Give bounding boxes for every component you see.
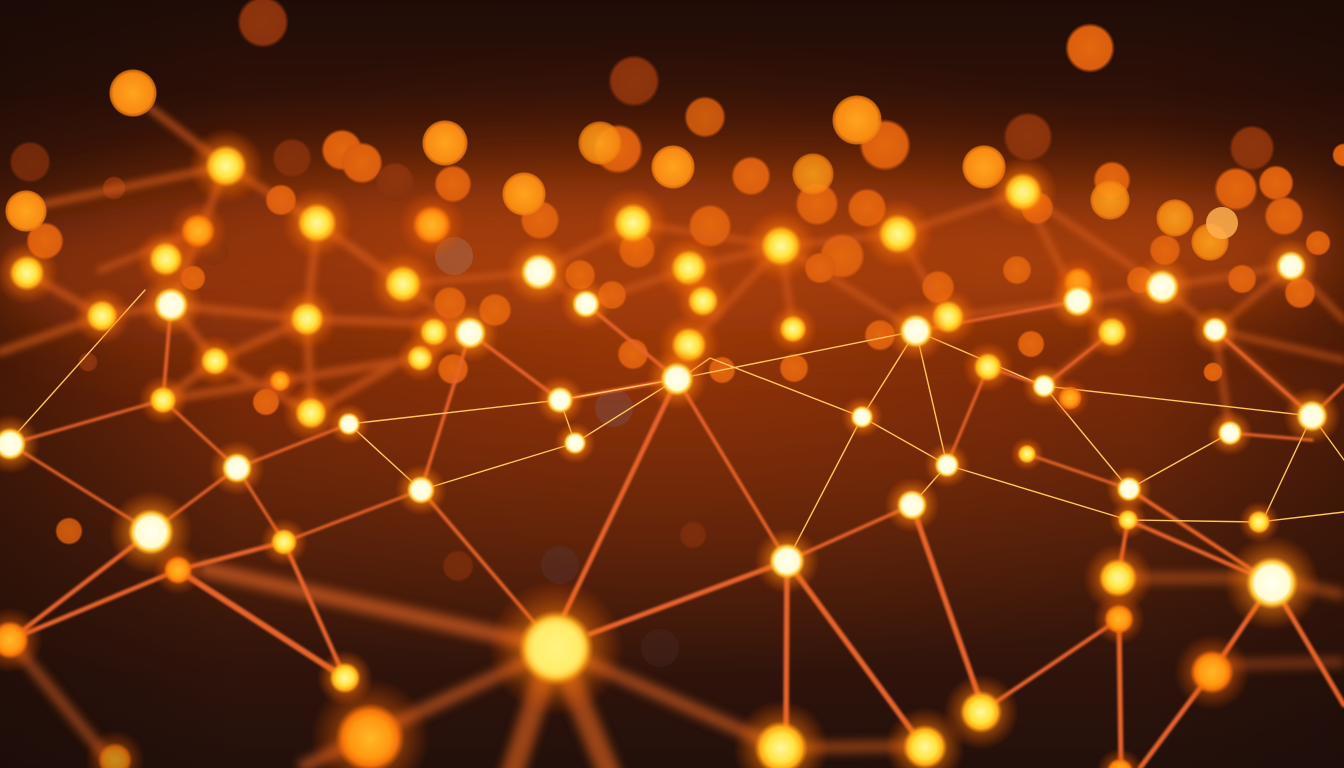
central hub node bbox=[488, 580, 624, 716]
blurred background links bbox=[0, 108, 1344, 433]
glowing upper nodes bbox=[0, 128, 1319, 442]
haze band behind the upper nodes bbox=[0, 180, 1344, 345]
network links, medium bbox=[10, 301, 1344, 768]
glowing foreground nodes bbox=[0, 300, 1341, 768]
bright bokeh lights bbox=[5, 23, 1238, 261]
foreground soft links bbox=[10, 568, 1344, 768]
network links, thin and bright bbox=[18, 290, 1344, 561]
